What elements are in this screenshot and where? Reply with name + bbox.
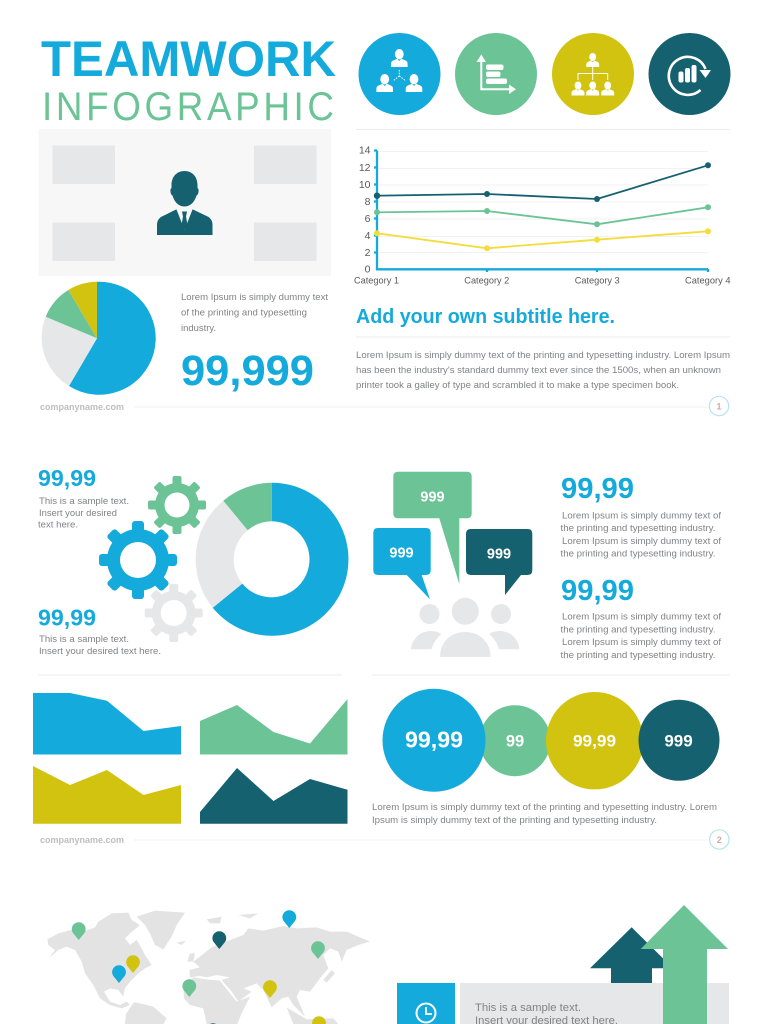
axis labels: 2 [365,247,371,259]
icon: group of people [411,598,520,657]
stat: 99,99 right upper: the printing and typesetting industry. [560,548,716,560]
paragraph: bubbles [372,802,717,826]
pie chart [42,282,156,395]
stat: 99,99 right lower [560,575,721,661]
stat: 99,99 right lower: 99,99 [561,575,634,607]
icon: team network [358,33,440,115]
line chart [354,144,730,286]
donut chart [196,483,348,636]
stat: 99,99 right upper: 99,99 [561,473,634,505]
title: INFOGRAPHIC [42,85,334,129]
footer 2 [40,830,729,849]
footer 1: companyname.com [40,402,124,412]
axis labels [354,144,730,286]
series: yellow [374,228,711,251]
stat: 99,99 top left: Insert your desired [39,508,117,519]
footer 1: 1 [716,402,722,412]
stat: 99,99 bottom left: 99,99 [38,604,96,630]
stat: 99,99 right upper: Lorem Ipsum is simply dummy text of [562,510,721,522]
stat: 99,99 top left: This is a sample text. [39,496,129,507]
paragraph: bubbles: Lorem Ipsum is simply dummy text of the printing and typesetting industry. Lorem [372,802,717,813]
bubble row: 99 [506,732,524,750]
icon: businessman [157,171,212,235]
paragraph: printer took a galley of type and scrambled it to make a type specimen book. [356,380,679,391]
paragraph [356,350,730,391]
icon: refresh chart [648,33,730,115]
stat: 99,99 bottom left: Insert your desired text here. [39,646,161,657]
axis labels: 12 [359,162,371,174]
axis labels: Category 3 [575,276,620,286]
speech bubble: blue: 999 [389,546,414,562]
map pins [72,910,326,1024]
icon: grey gear [145,584,203,642]
title [41,31,336,129]
panel: leader with four placeholders [38,129,331,276]
paragraph: Lorem Ipsum is simply dummy text of the printing and typesetting industry. Lorem Ipsum [356,350,730,361]
bubble row: 99,99 [573,732,616,750]
text block: pie description: Lorem Ipsum is simply dummy text [181,292,328,303]
speech bubble: dark: 999 [487,546,511,562]
series: dark [374,162,711,202]
axis labels: 10 [359,179,371,191]
bubble row [382,689,720,792]
icon: bar chart axes [455,33,537,115]
footer 2: companyname.com [40,835,124,845]
footer 1 [40,396,729,416]
area chart: yellow [33,766,181,824]
stat: 99,99 top left [38,465,129,530]
bubble row: 999 [664,732,693,750]
icon: organisation chart [552,33,634,115]
axis labels: 4 [365,230,371,242]
stat: 99,99 right lower: Lorem Ipsum is simply dummy text of [562,637,721,648]
title: TEAMWORK [41,31,336,87]
text block: pie description [181,292,328,334]
arrow: green [641,905,728,1024]
stat: 99,99 bottom left: This is a sample text. [39,634,129,645]
big number: 99,999 [181,347,314,395]
series: green [374,204,711,227]
speech bubble: green: 999 [420,490,445,506]
area chart: dark [200,768,348,824]
axis labels: Category 4 [685,276,730,286]
paragraph: has been the industry's standard dummy text ever since the 1500s, when an unknown [356,365,721,376]
area chart: green [200,699,348,754]
axis labels: 14 [359,144,371,156]
text box: sample text [460,983,729,1024]
stat: 99,99 right upper: Lorem Ipsum is simply dummy text of [562,536,721,547]
world map [47,911,370,1024]
text box: sample text: This is a sample text. [475,1002,581,1014]
stat: 99,99 right lower: the printing and typesetting industry. [560,624,716,636]
icon: blue gear [99,521,177,599]
icon: clock [397,983,455,1024]
stat: 99,99 top left: text here. [38,520,78,530]
subtitle: Add your own subtitle here. [356,306,615,328]
axis labels: 8 [365,196,371,208]
axis labels: Category 2 [464,276,509,286]
footer 2: 2 [717,835,722,845]
arrow: dark [590,927,673,983]
axis labels: 0 [365,264,371,276]
paragraph: bubbles: Ipsum is simply dummy text of the printing and typesetting industry. [372,815,657,826]
stat: 99,99 right lower: Lorem Ipsum is simply dummy text of [562,612,721,622]
icon: green gear [148,476,206,534]
stat: 99,99 right upper [560,473,721,560]
bubble row: 99,99 [405,727,463,753]
stat: 99,99 top left: 99,99 [38,465,96,491]
speech bubble: blue [373,528,431,599]
stat: 99,99 right upper: the printing and typesetting industry. [560,523,716,534]
stat: 99,99 bottom left [38,604,161,657]
speech bubble: dark [466,529,532,595]
text block: pie description: industry. [181,323,216,334]
area chart: blue [33,693,181,754]
speech bubble: green [393,472,472,584]
axis labels: Category 1 [354,276,399,286]
axis labels: 6 [365,213,371,225]
text block: pie description: of the printing and typesetting [181,308,307,319]
stat: 99,99 right lower: the printing and typesetting industry. [560,650,716,661]
